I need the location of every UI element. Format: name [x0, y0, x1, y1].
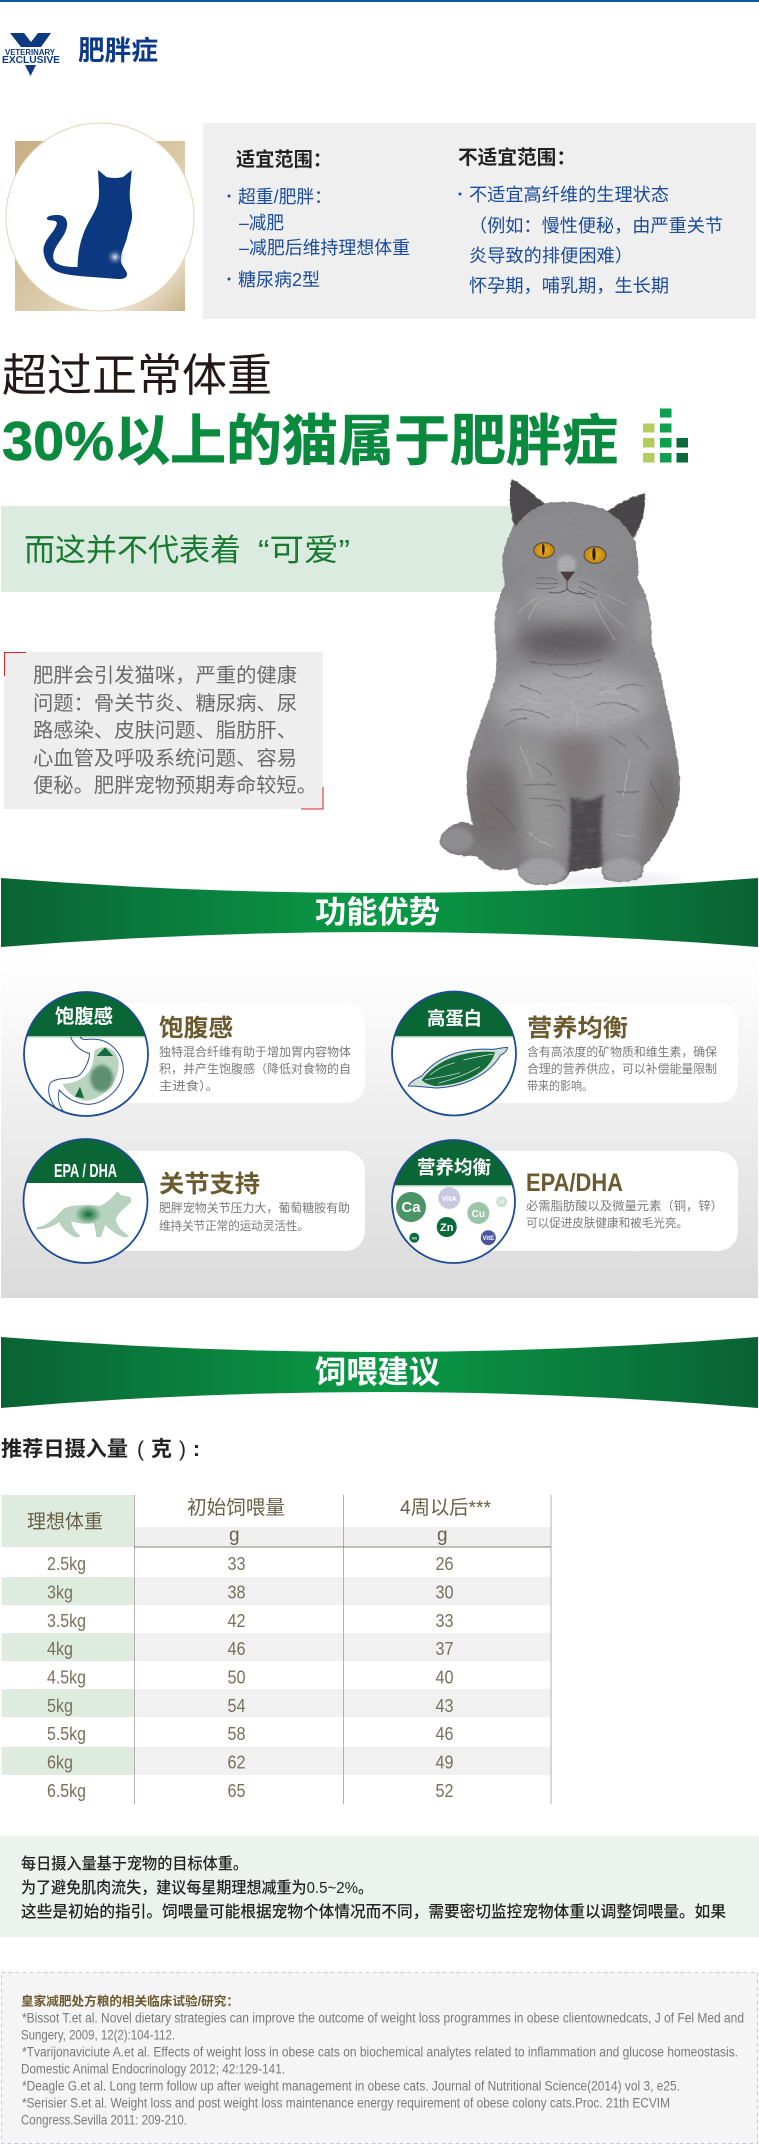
icon: walking cat: [24, 1140, 144, 1262]
tail: [440, 828, 473, 852]
table headers: g: [437, 1525, 448, 1546]
haunches: [465, 763, 522, 850]
heading: unsuitable: 不适宜范围：: [458, 146, 576, 169]
table headers: 4周以后***: [400, 1497, 491, 1519]
description: satiety: 独特混合纤维有助于增加胃内容物体: [159, 1044, 351, 1059]
icon: nutrient bubbles: Zn: [440, 1222, 454, 1234]
table rows: 54: [228, 1696, 246, 1716]
heading: recommended daily intake: [1, 1438, 200, 1461]
table rows: 38: [228, 1582, 246, 1602]
subheading band: “可爱”: [258, 533, 350, 568]
headline: over normal weight: 超过正常体重: [2, 350, 272, 401]
list: suitable: –减肥后维持理想体重: [239, 238, 410, 258]
logo: veterinary exclusive: [2, 33, 60, 76]
table rows: 3kg: [47, 1582, 73, 1602]
list: suitable: 超重/肥胖：: [238, 187, 332, 207]
fur marks: [490, 660, 663, 830]
list: unsuitable: 不适宜高纤维的生理状态: [469, 185, 669, 205]
references list: *Serisier S.et al. Weight loss and post weight loss maintenance energy requirement of obese colony cats.Proc. 21th ECVIM: [22, 2096, 670, 2110]
heading: recommended daily intake: 克: [151, 1438, 172, 1461]
panel: suitable and unsuitable ranges: [203, 123, 756, 319]
face: [506, 534, 636, 544]
icon: nutrient bubbles: VitE: [483, 1236, 494, 1242]
table rows: 6kg: [47, 1752, 73, 1772]
description: satiety: 主进食）。: [159, 1078, 219, 1093]
label: high protein badge: 高蛋白: [427, 1008, 482, 1029]
icon: nutrient bubbles: Ca: [401, 1199, 421, 1216]
text box: health risks: 肥胖会引发猫咪，严重的健康: [33, 664, 297, 687]
table rows: 43: [436, 1696, 454, 1716]
table rows: 62: [228, 1752, 246, 1772]
subheading band: 而这并不代表着: [24, 533, 241, 568]
references list: Congress.Sevilla 2011: 209-210.: [21, 2112, 187, 2128]
text box: health risks: 心血管及呼吸系统问题、容易: [33, 747, 297, 770]
description: EPA DHA: [526, 1198, 723, 1230]
table rows: 42: [228, 1611, 246, 1631]
shadow between legs: [568, 793, 603, 873]
table rows: 30: [436, 1582, 454, 1602]
panel: cat icon badge: [6, 123, 194, 311]
icon: muscle: [390, 990, 520, 1116]
note panel: feeding guidance: 为了避免肌肉流失，建议每星期理想减重为0.5~2%。: [21, 1878, 373, 1897]
list: unsuitable: 怀孕期，哺乳期，生长期: [469, 276, 669, 296]
neck shadow: [517, 624, 617, 659]
label: nutrition badge: 营养均衡: [417, 1157, 491, 1178]
table rows: 50: [228, 1668, 246, 1688]
heading: recommended daily intake: :: [193, 1438, 200, 1461]
list: suitable: [228, 187, 410, 290]
text box: health risks: 问题：骨关节炎、糖尿病、尿: [33, 692, 297, 715]
note panel: feeding guidance: 这些是初始的指引。饲喂量可能根据宠物个体情况而不同，需要密切监控宠物体重以调整饲喂量。如果: [21, 1902, 726, 1921]
description: EPA DHA: 可以促进皮肤健康和被毛光亮。: [526, 1215, 688, 1230]
table headers: 理想体重: [27, 1511, 103, 1533]
table rows: 5kg: [47, 1696, 73, 1716]
icon: blue cat silhouette: [43, 170, 132, 279]
table rows: 46: [228, 1639, 246, 1659]
icon: nutrient bubbles: Cu: [472, 1209, 485, 1220]
description: satiety: 积，并产生饱腹感（降低对食物的自: [159, 1061, 351, 1076]
photo: grey british shorthair cat: [440, 479, 680, 888]
label: EPA DHA badge: EPA / DHA: [54, 1161, 117, 1181]
icon: nutrient bubbles: VitA: [442, 1194, 457, 1203]
list: suitable: –减肥: [239, 213, 284, 233]
table rows: 26: [436, 1554, 454, 1574]
heading: suitable: 适宜范围：: [236, 148, 332, 171]
nose and mouth: [560, 572, 575, 582]
description: balanced nutrition: 合理的营养供应，可以补偿能量限制: [527, 1061, 717, 1076]
card: satiety: [20, 990, 365, 1116]
page title: 肥胖症: [78, 36, 158, 66]
note panel: feeding guidance: [0, 1836, 759, 1937]
description: satiety: [159, 1044, 351, 1093]
section banner: feeding advice: 饲喂建议: [315, 1355, 440, 1390]
table rows: 49: [436, 1752, 454, 1772]
table rows: 58: [228, 1724, 246, 1744]
card: EPA DHA: [390, 1135, 738, 1263]
icon: nutrient bubbles: Cl: [499, 1200, 504, 1204]
title: joint support: 关节支持: [159, 1171, 260, 1198]
list: unsuitable: 炎导致的排便困难）: [469, 246, 633, 266]
title: EPA DHA: EPA/DHA: [526, 1169, 623, 1197]
table rows: 46: [436, 1724, 454, 1744]
list: unsuitable: （例如：慢性便秘，由严重关节: [469, 216, 723, 236]
table rows: 52: [436, 1781, 454, 1801]
references list: Domestic Animal Endocrinology 2012; 42:129-141.: [21, 2062, 285, 2076]
chest: [493, 667, 653, 737]
table rows: 5.5kg: [47, 1724, 86, 1744]
title: satiety: 饱腹感: [159, 1014, 233, 1042]
description: balanced nutrition: 含有高浓度的矿物质和维生素，确保: [527, 1044, 717, 1059]
icon: nutrient bubbles: Vit: [412, 1236, 417, 1240]
table rows: 33: [228, 1554, 246, 1574]
references list: Sungery, 2009, 12(2):104-112.: [21, 2028, 175, 2042]
heading: recommended daily intake: (: [137, 1438, 144, 1461]
description: balanced nutrition: [527, 1044, 717, 1093]
label: satiety badge: 饱腹感: [55, 1006, 113, 1028]
section banner: benefits: 功能优势: [315, 895, 440, 930]
list: unsuitable: [458, 185, 723, 296]
panel: references: [2, 1972, 758, 2144]
whisker pads and whiskers: [536, 578, 597, 598]
table rows: 4kg: [47, 1639, 73, 1659]
text box: health risks: [4, 652, 323, 809]
top rule: [0, 0, 759, 2]
references list: *Deagle G.et al. Long term follow up after weight management in obese cats. Journal of Nutritional Science(2014) vol 3, e25.: [22, 2078, 680, 2094]
section banner: benefits: [1, 878, 758, 947]
logo: veterinary exclusive: VETERINARY: [5, 48, 56, 57]
eyes: [534, 543, 554, 558]
text box: health risks: 便秘。肥胖宠物预期寿命较短。: [33, 774, 317, 797]
icon: stomach: [25, 992, 145, 1115]
description: joint support: 肥胖宠物关节压力大，葡萄糖胺有助: [159, 1200, 350, 1215]
note panel: feeding guidance: 每日摄入量基于宠物的目标体重。: [21, 1854, 248, 1873]
card: joint support: [20, 1135, 365, 1263]
table rows: 6.5kg: [47, 1781, 86, 1801]
table rows: 65: [228, 1781, 246, 1801]
headline: 30 percent: 30%以上的猫属于肥胖症: [2, 410, 618, 472]
heading: recommended daily intake: ): [179, 1438, 186, 1461]
table rows: 2.5kg: [47, 1554, 86, 1574]
description: EPA DHA: 必需脂肪酸以及微量元素（铜，锌）: [526, 1198, 723, 1213]
table: daily intake: [2, 1495, 551, 1804]
subheading band: [1, 506, 515, 592]
table rows: 4.5kg: [47, 1668, 86, 1688]
table rows: 33: [436, 1611, 454, 1631]
icon: nutrient bubbles: [393, 1140, 512, 1262]
panel: benefits grey background: [1, 955, 758, 1298]
table headers: g: [229, 1525, 240, 1546]
front legs: [508, 740, 570, 863]
references heading: 皇家减肥处方粮的相关临床试验/研究：: [21, 1994, 239, 2008]
leg contours: [508, 763, 657, 863]
description: joint support: 维持关节正常的运动灵活性。: [159, 1218, 309, 1233]
section banner: feeding advice: [1, 1337, 758, 1408]
icon: bar dots: [643, 408, 688, 462]
table headers: 初始饲喂量: [187, 1497, 285, 1519]
table rows: [47, 1554, 454, 1801]
description: joint support: [159, 1200, 350, 1233]
paws: [518, 858, 566, 885]
title: balanced nutrition: 营养均衡: [527, 1015, 628, 1042]
references list: [21, 2010, 744, 2128]
table headers: [27, 1497, 491, 1546]
description: balanced nutrition: 带来的影响。: [527, 1078, 593, 1093]
logo: veterinary exclusive: EXCLUSIVE: [2, 54, 60, 66]
fur grain: [504, 548, 636, 871]
table rows: 40: [436, 1668, 454, 1688]
card: high protein: [390, 990, 738, 1116]
list: suitable: 糖尿病2型: [238, 270, 320, 290]
text box: health risks: 路感染、皮肤问题、脂肪肝、: [33, 719, 297, 742]
ears: [510, 479, 544, 527]
table rows: 3.5kg: [47, 1611, 86, 1631]
heading: recommended daily intake: 推荐日摄入量: [1, 1438, 128, 1461]
table rows: 37: [436, 1639, 454, 1659]
